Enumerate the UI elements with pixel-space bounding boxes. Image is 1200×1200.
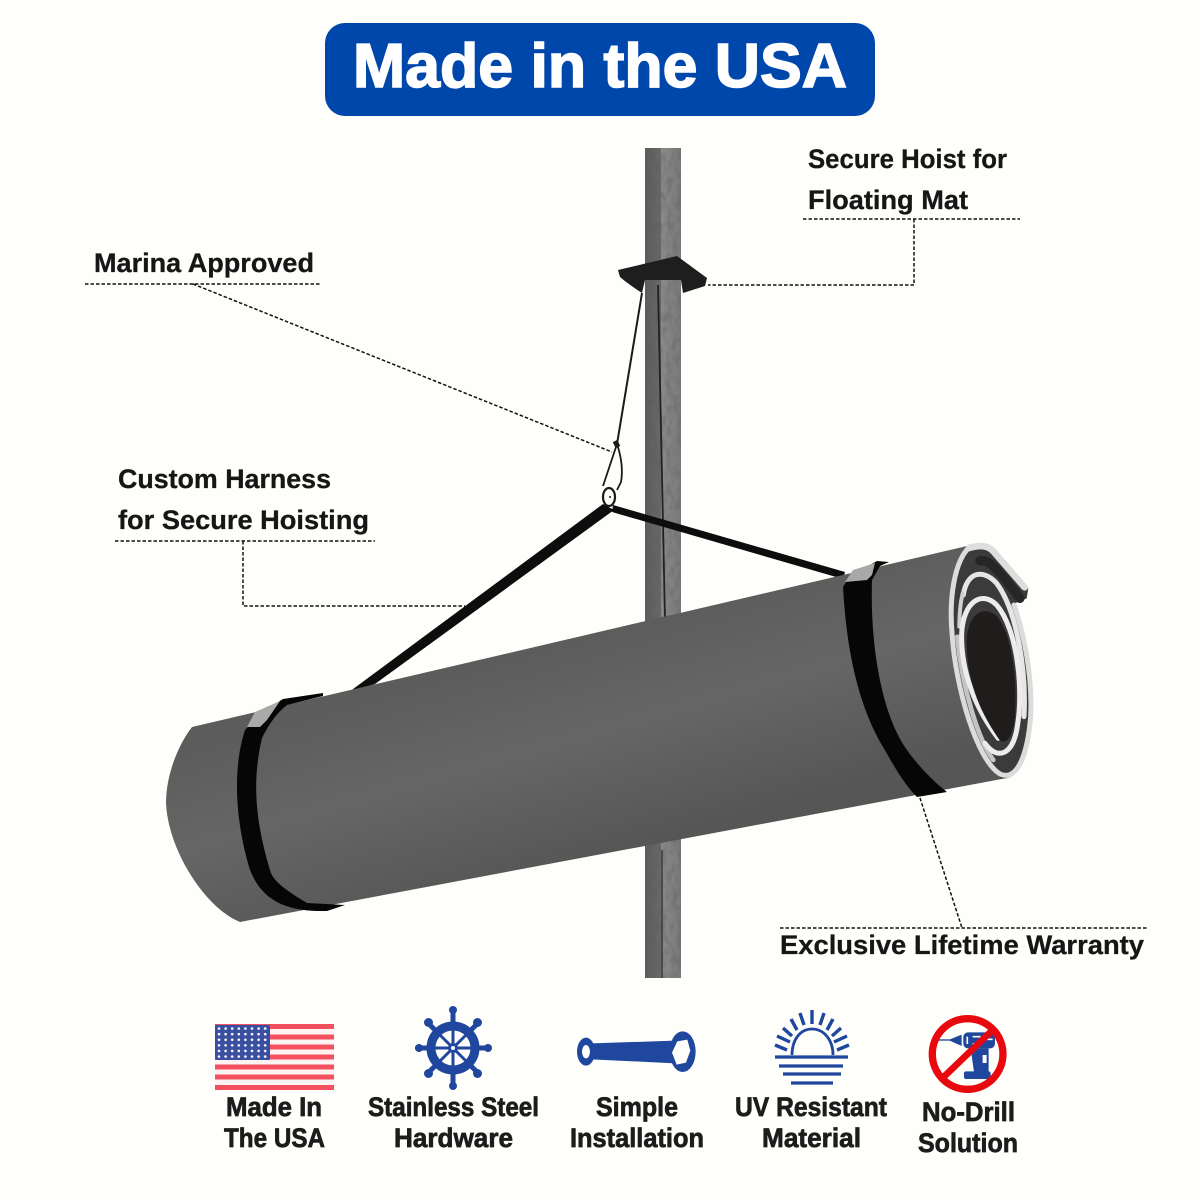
icon: ship wheel <box>415 1006 492 1090</box>
icon: wrench <box>577 1031 696 1072</box>
left buckle <box>247 701 280 727</box>
mat roll end <box>950 544 1032 778</box>
title: Made in the USA <box>353 32 847 101</box>
icon: no drill <box>932 1019 1003 1089</box>
feature: Made In The USA <box>215 1024 334 1153</box>
callout: Custom Harness: Custom Harness <box>118 464 331 494</box>
feature: UV Resistant Material: Material <box>762 1123 861 1153</box>
callout: Secure Hoist for Floating Mat <box>708 144 1020 285</box>
feature: Stainless Steel Hardware: Hardware <box>394 1123 513 1153</box>
callout: Custom Harness: for Secure Hoisting <box>118 505 369 535</box>
feature: Made In The USA: The USA <box>224 1123 325 1153</box>
feature: No-Drill Solution: No-Drill <box>922 1097 1015 1127</box>
title <box>325 23 875 116</box>
feature: Simple Installation: Installation <box>570 1123 704 1153</box>
hoist wire and clip <box>603 293 642 506</box>
icon: sun over water <box>775 1010 849 1083</box>
harness straps <box>349 504 845 692</box>
callout: Marina Approved <box>85 248 612 452</box>
feature: Simple Installation <box>570 1031 704 1153</box>
right band <box>843 561 947 797</box>
feature: Made In The USA: Made In <box>226 1092 322 1122</box>
callout: Exclusive Lifetime Warranty: Exclusive Lifetime Warranty <box>780 930 1144 960</box>
feature: No-Drill Solution <box>918 1019 1018 1158</box>
callout: Custom Harness <box>115 464 465 606</box>
feature: No-Drill Solution: Solution <box>918 1128 1018 1158</box>
callout: Marina Approved: Marina Approved <box>94 248 314 278</box>
right buckle <box>845 563 875 582</box>
icon: US flag <box>215 1024 334 1090</box>
callout: Secure Hoist for Floating Mat: Secure Hoist for <box>808 144 1007 174</box>
mat body <box>166 546 1007 922</box>
left band <box>237 693 345 911</box>
post <box>645 148 681 978</box>
feature: UV Resistant Material <box>735 1010 887 1153</box>
bracket <box>618 256 707 293</box>
feature: Stainless Steel Hardware <box>368 1006 539 1153</box>
callout: Secure Hoist for Floating Mat: Floating Mat <box>808 185 968 215</box>
feature: Stainless Steel Hardware: Stainless Steel <box>368 1092 539 1122</box>
feature: Simple Installation: Simple <box>596 1092 678 1122</box>
feature: UV Resistant Material: UV Resistant <box>735 1092 887 1122</box>
callout: Exclusive Lifetime Warranty <box>780 798 1148 960</box>
rolled mat <box>166 544 1032 922</box>
